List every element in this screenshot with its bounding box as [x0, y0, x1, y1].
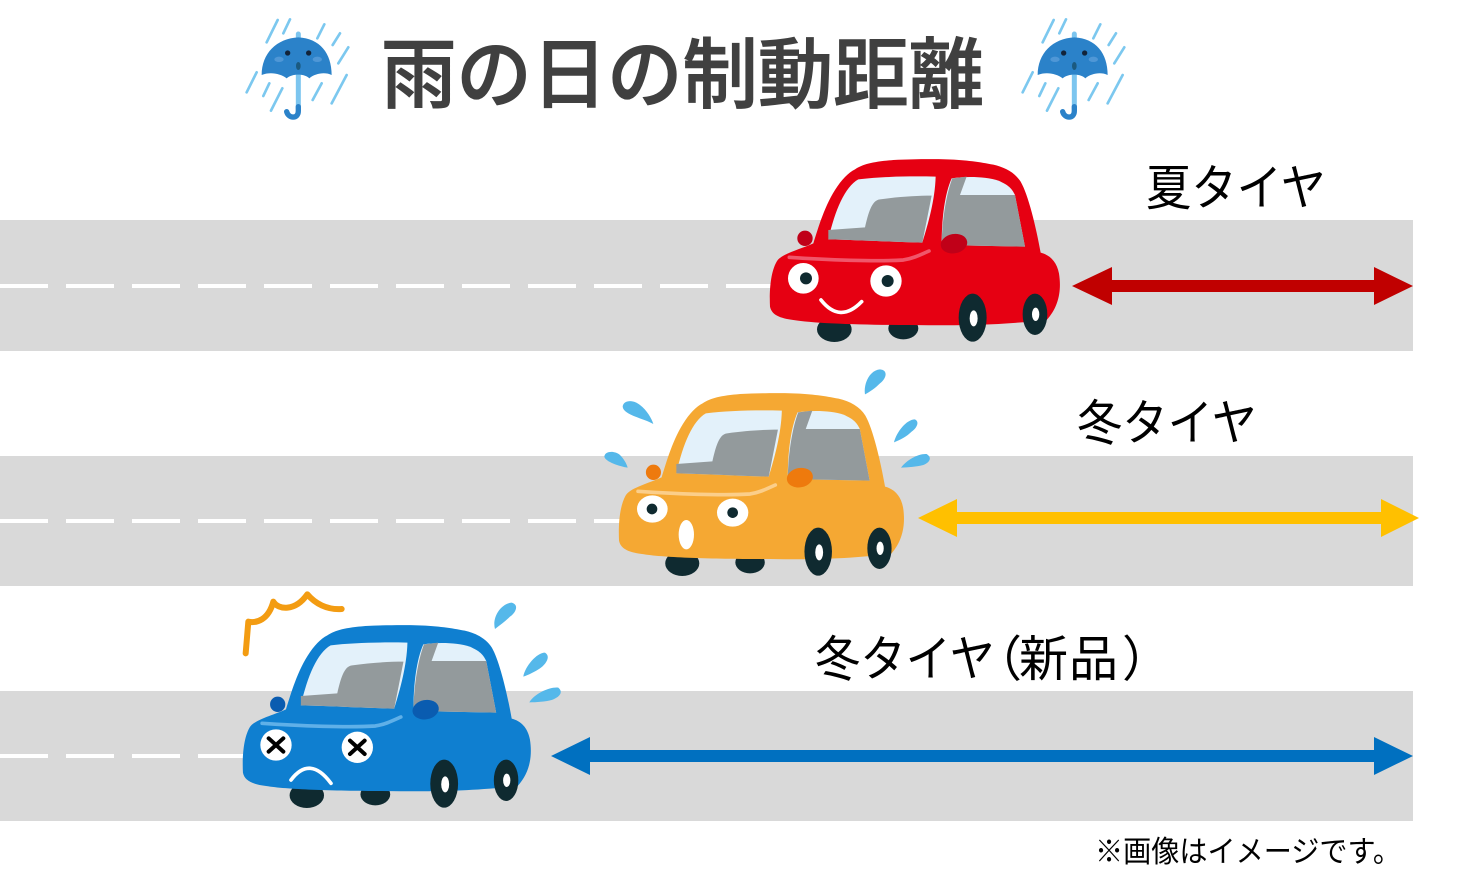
- panel: winter tire road: [0, 456, 1413, 586]
- blue car face, sweat and shock mark: [246, 594, 561, 783]
- orange car face and sweat: [604, 369, 930, 549]
- title: 雨の日の制動距離: [381, 33, 984, 119]
- car: orange worried: [619, 393, 904, 576]
- label: new winter tire: 品: [1069, 633, 1118, 687]
- panel: summer tire road: [0, 220, 1413, 351]
- arrow: summer tire braking distance: [1072, 267, 1413, 305]
- label: summer tire: 夏タイヤ: [1146, 162, 1326, 216]
- label: new winter tire: 新: [1019, 633, 1068, 687]
- arrow: new winter tire braking distance: [551, 737, 1413, 775]
- label: new winter tire: ）: [1122, 633, 1171, 687]
- label: winter tire: 冬タイヤ: [1077, 397, 1257, 451]
- icon: rainy umbrella right: [1023, 19, 1124, 117]
- car: blue dizzy: [243, 625, 531, 808]
- icon: rainy umbrella left: [247, 19, 348, 117]
- label: new winter tire: 冬タイヤ: [815, 633, 995, 687]
- car: red smiling: [770, 159, 1060, 342]
- arrow: winter tire braking distance: [918, 499, 1419, 537]
- label: new winter tire: （: [973, 633, 1022, 687]
- note: image disclaimer: ※画像はイメージです。: [1095, 836, 1401, 869]
- panel: new winter tire road: [0, 691, 1413, 821]
